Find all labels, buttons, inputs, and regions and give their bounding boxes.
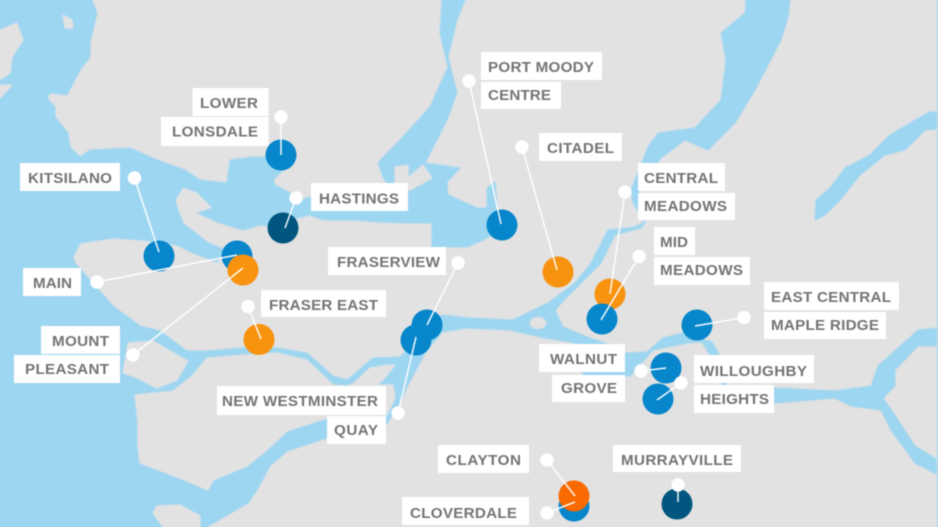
marker: Willoughby Heights: WILLOUGHBY (700, 363, 807, 380)
marker: Mid Meadows (586, 227, 750, 334)
marker: Fraserview: FRASERVIEW (337, 254, 441, 271)
marker: New Westminster Quay: NEW WESTMINSTER (222, 393, 378, 410)
marker: Port Moody Centre: CENTRE (488, 87, 551, 104)
marker: Citadel (515, 133, 622, 288)
marker: New Westminster Quay (217, 324, 432, 444)
marker: Willoughby Heights (642, 355, 814, 414)
marker: Mid Meadows: MID (660, 234, 688, 251)
marker: Kitsilano (20, 163, 174, 272)
marker: New Westminster Quay: QUAY (334, 422, 378, 439)
marker: Mount Pleasant (14, 254, 258, 383)
marker: Lower Lonsdale: LOWER (200, 95, 258, 112)
marker: Willoughby Heights: HEIGHTS (700, 391, 769, 408)
marker: Central Meadows (594, 163, 735, 310)
marker: Central Meadows: CENTRAL (644, 170, 718, 187)
marker: Clayton: CLAYTON (446, 452, 521, 469)
marker: Murrayville (613, 445, 741, 520)
marker: East Central Maple Ridge (682, 282, 899, 340)
marker: Hastings (268, 183, 408, 244)
marker: Hastings: HASTINGS (319, 190, 399, 208)
marker: Walnut Grove (539, 344, 682, 402)
marker: Main (23, 240, 252, 296)
marker: Main: MAIN (33, 275, 72, 292)
marker: Citadel: CITADEL (547, 140, 614, 157)
marker: Fraser East: FRASER EAST (269, 297, 379, 314)
marker: Mount Pleasant: MOUNT (52, 333, 110, 350)
marker: Port Moody Centre: PORT MOODY (488, 59, 594, 76)
marker: Lower Lonsdale (161, 88, 296, 170)
marker: Walnut Grove: WALNUT (550, 351, 618, 368)
marker: Walnut Grove: GROVE (561, 380, 617, 397)
marker: Mid Meadows: MEADOWS (660, 262, 743, 279)
marker: Fraser East (241, 290, 386, 355)
marker: Central Meadows: MEADOWS (644, 198, 727, 215)
marker: Mount Pleasant: PLEASANT (25, 361, 110, 378)
marker: Clayton (438, 445, 590, 512)
marker: Fraserview (328, 247, 465, 340)
marker: Port Moody Centre (462, 52, 602, 240)
marker: East Central Maple Ridge: EAST CENTRAL (771, 289, 891, 306)
marker: Cloverdale: CLOVERDALE (410, 505, 517, 522)
marker: Kitsilano: KITSILANO (28, 170, 112, 187)
marker: East Central Maple Ridge: MAPLE RIDGE (771, 317, 879, 334)
marker: Murrayville: MURRAYVILLE (621, 452, 733, 469)
marker: Cloverdale (402, 490, 590, 525)
marker: Lower Lonsdale: LONSDALE (172, 124, 258, 140)
Cloverdale leader (540, 502, 575, 520)
